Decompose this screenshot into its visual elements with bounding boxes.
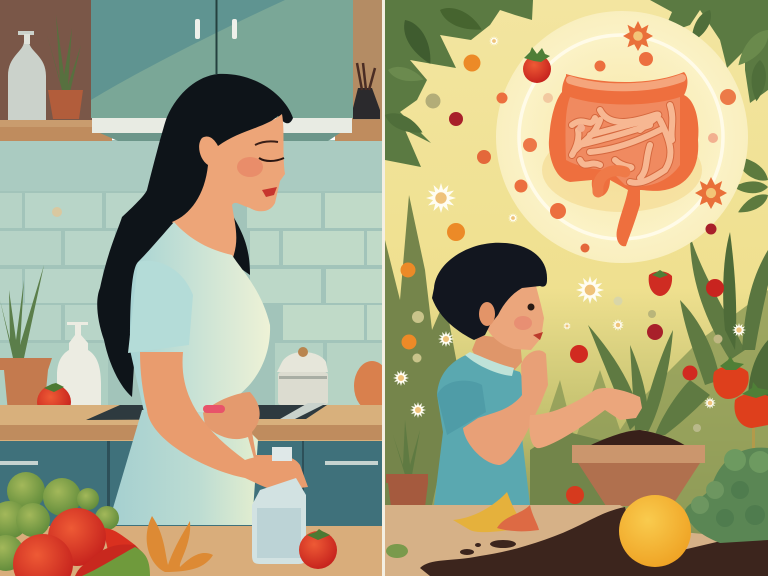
fruit pile xyxy=(0,472,150,576)
shirt xyxy=(434,355,530,505)
lemon xyxy=(619,495,691,567)
floating fruits and dots xyxy=(400,52,736,504)
icon: potted plant on shelf xyxy=(47,15,83,119)
icon: dark vase with sticks xyxy=(353,63,380,119)
icon: lotion bottle on shelf xyxy=(8,31,46,120)
skirt xyxy=(108,410,258,525)
shelf xyxy=(0,118,382,141)
intestines xyxy=(549,72,698,246)
sleeve xyxy=(437,381,486,435)
foliage: top right xyxy=(650,0,768,103)
soil crumbs xyxy=(460,540,516,555)
icon: cooking pot xyxy=(277,347,328,405)
icon: water bottle xyxy=(252,447,306,564)
front counter xyxy=(0,526,382,576)
background xyxy=(385,0,768,576)
reaching arm xyxy=(529,388,642,448)
eye xyxy=(259,158,284,161)
back counter xyxy=(0,403,382,441)
icon: tomato on back counter xyxy=(37,383,71,419)
lower cabinets xyxy=(0,441,382,526)
panel: gut health garden (right) xyxy=(382,0,768,576)
broccoli xyxy=(685,448,768,543)
front arm raised to chin xyxy=(463,350,548,465)
divider xyxy=(382,0,385,576)
colon bumps xyxy=(570,78,682,87)
small green sprig xyxy=(386,544,408,558)
hand on belly and back arm xyxy=(203,392,272,470)
background plants xyxy=(385,195,768,520)
table xyxy=(385,505,768,576)
floating tomato top xyxy=(523,47,551,83)
strawberry near top right xyxy=(649,270,672,296)
face and neck xyxy=(172,114,285,260)
front arm xyxy=(140,352,308,495)
icon: soap dispenser xyxy=(57,322,101,411)
foliage: right spiky leaves xyxy=(730,151,768,218)
child xyxy=(432,243,642,505)
spilled soil xyxy=(420,507,768,576)
icon: orange leaves xyxy=(147,516,213,572)
panel: kitchen (left) xyxy=(0,0,390,576)
mouth xyxy=(533,332,543,340)
lips xyxy=(262,187,277,197)
face xyxy=(480,282,544,350)
woman xyxy=(97,74,308,525)
eye xyxy=(528,304,534,310)
foliage: top left xyxy=(382,0,533,167)
inner cavity xyxy=(565,97,680,186)
cecum loop xyxy=(598,171,625,192)
small intestine coils xyxy=(572,105,672,183)
small potted plant xyxy=(386,420,428,515)
hair xyxy=(97,74,293,397)
top of dress xyxy=(130,222,270,412)
icon: pumpkin xyxy=(354,361,390,411)
white ring xyxy=(519,35,723,239)
icon: tomato on front counter xyxy=(299,529,337,569)
banana peel xyxy=(453,492,539,532)
soft shadow under intestine xyxy=(542,128,702,212)
neck xyxy=(472,335,522,375)
large pepper tomatoes xyxy=(713,356,768,450)
ear xyxy=(479,302,495,326)
icon: potted aloe xyxy=(0,265,52,412)
brow xyxy=(255,141,278,145)
big terracotta pot xyxy=(572,430,705,506)
tiled wall xyxy=(0,140,382,410)
collar xyxy=(465,352,514,376)
upper cabinets xyxy=(91,0,353,118)
large intestine xyxy=(549,72,698,246)
wall alcove right xyxy=(352,0,382,122)
wall alcove left xyxy=(0,0,92,122)
daisies xyxy=(393,36,746,418)
hair xyxy=(432,243,547,340)
sleeve xyxy=(128,261,193,353)
glow circle xyxy=(496,11,748,263)
orange flowers xyxy=(623,21,727,209)
